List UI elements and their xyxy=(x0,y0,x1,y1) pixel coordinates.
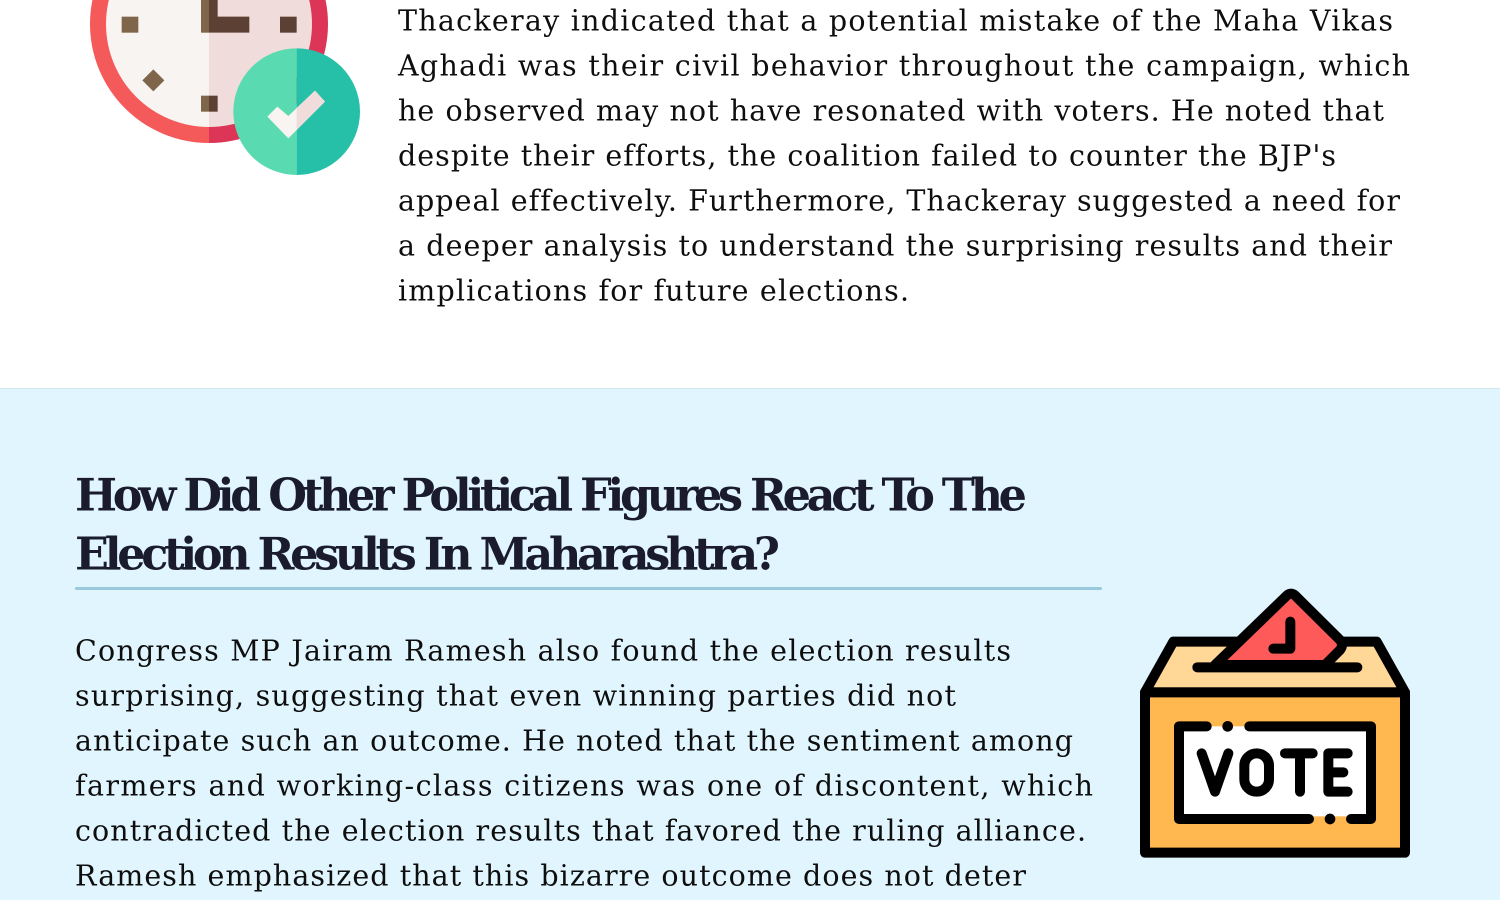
heading: Election Results In Maharashtra? xyxy=(75,528,780,580)
text block: Thackeray paragraph xyxy=(397,4,1410,308)
icon: clock with check mark xyxy=(90,0,360,175)
text block: Thackeray paragraph: appeal effectively. Furthermore, Thackeray suggested a need for xyxy=(398,184,1400,218)
text block: Ramesh paragraph: farmers and working-class citizens was one of discontent, which xyxy=(75,770,1093,802)
text block: Thackeray paragraph: despite their efforts, the coalition failed to counter the BJP's xyxy=(398,140,1336,172)
text block: Thackeray paragraph: he observed may not have resonated with voters. He noted that xyxy=(398,94,1385,128)
heading: How Did Other Political Figures React To The xyxy=(75,470,1027,522)
text block: Ramesh paragraph: contradicted the election results that favored the ruling alliance. xyxy=(75,814,1086,848)
text block: Thackeray paragraph: a deeper analysis to understand the surprising results and their xyxy=(398,230,1392,262)
text block: Thackeray paragraph: Aghadi was their civil behavior throughout the campaign, which xyxy=(397,50,1410,82)
text block: Ramesh paragraph: Congress MP Jairam Ramesh also found the election results xyxy=(75,634,1011,668)
icon: vote ballot box xyxy=(1145,594,1405,853)
panel: other political figures xyxy=(0,388,1500,900)
text block: Ramesh paragraph xyxy=(75,634,1093,892)
heading xyxy=(75,470,1027,580)
text block: Ramesh paragraph: anticipate such an outcome. He noted that the sentiment among xyxy=(75,724,1073,758)
text block: Ramesh paragraph: surprising, suggesting that even winning parties did not xyxy=(75,680,957,712)
text block: Ramesh paragraph: Ramesh emphasized that this bizarre outcome does not deter xyxy=(75,860,1026,892)
text block: Thackeray paragraph: implications for future elections. xyxy=(398,274,909,308)
text block: Thackeray paragraph: Thackeray indicated that a potential mistake of the Maha Vikas xyxy=(398,4,1393,38)
panel: Thackeray reaction xyxy=(0,0,1500,388)
